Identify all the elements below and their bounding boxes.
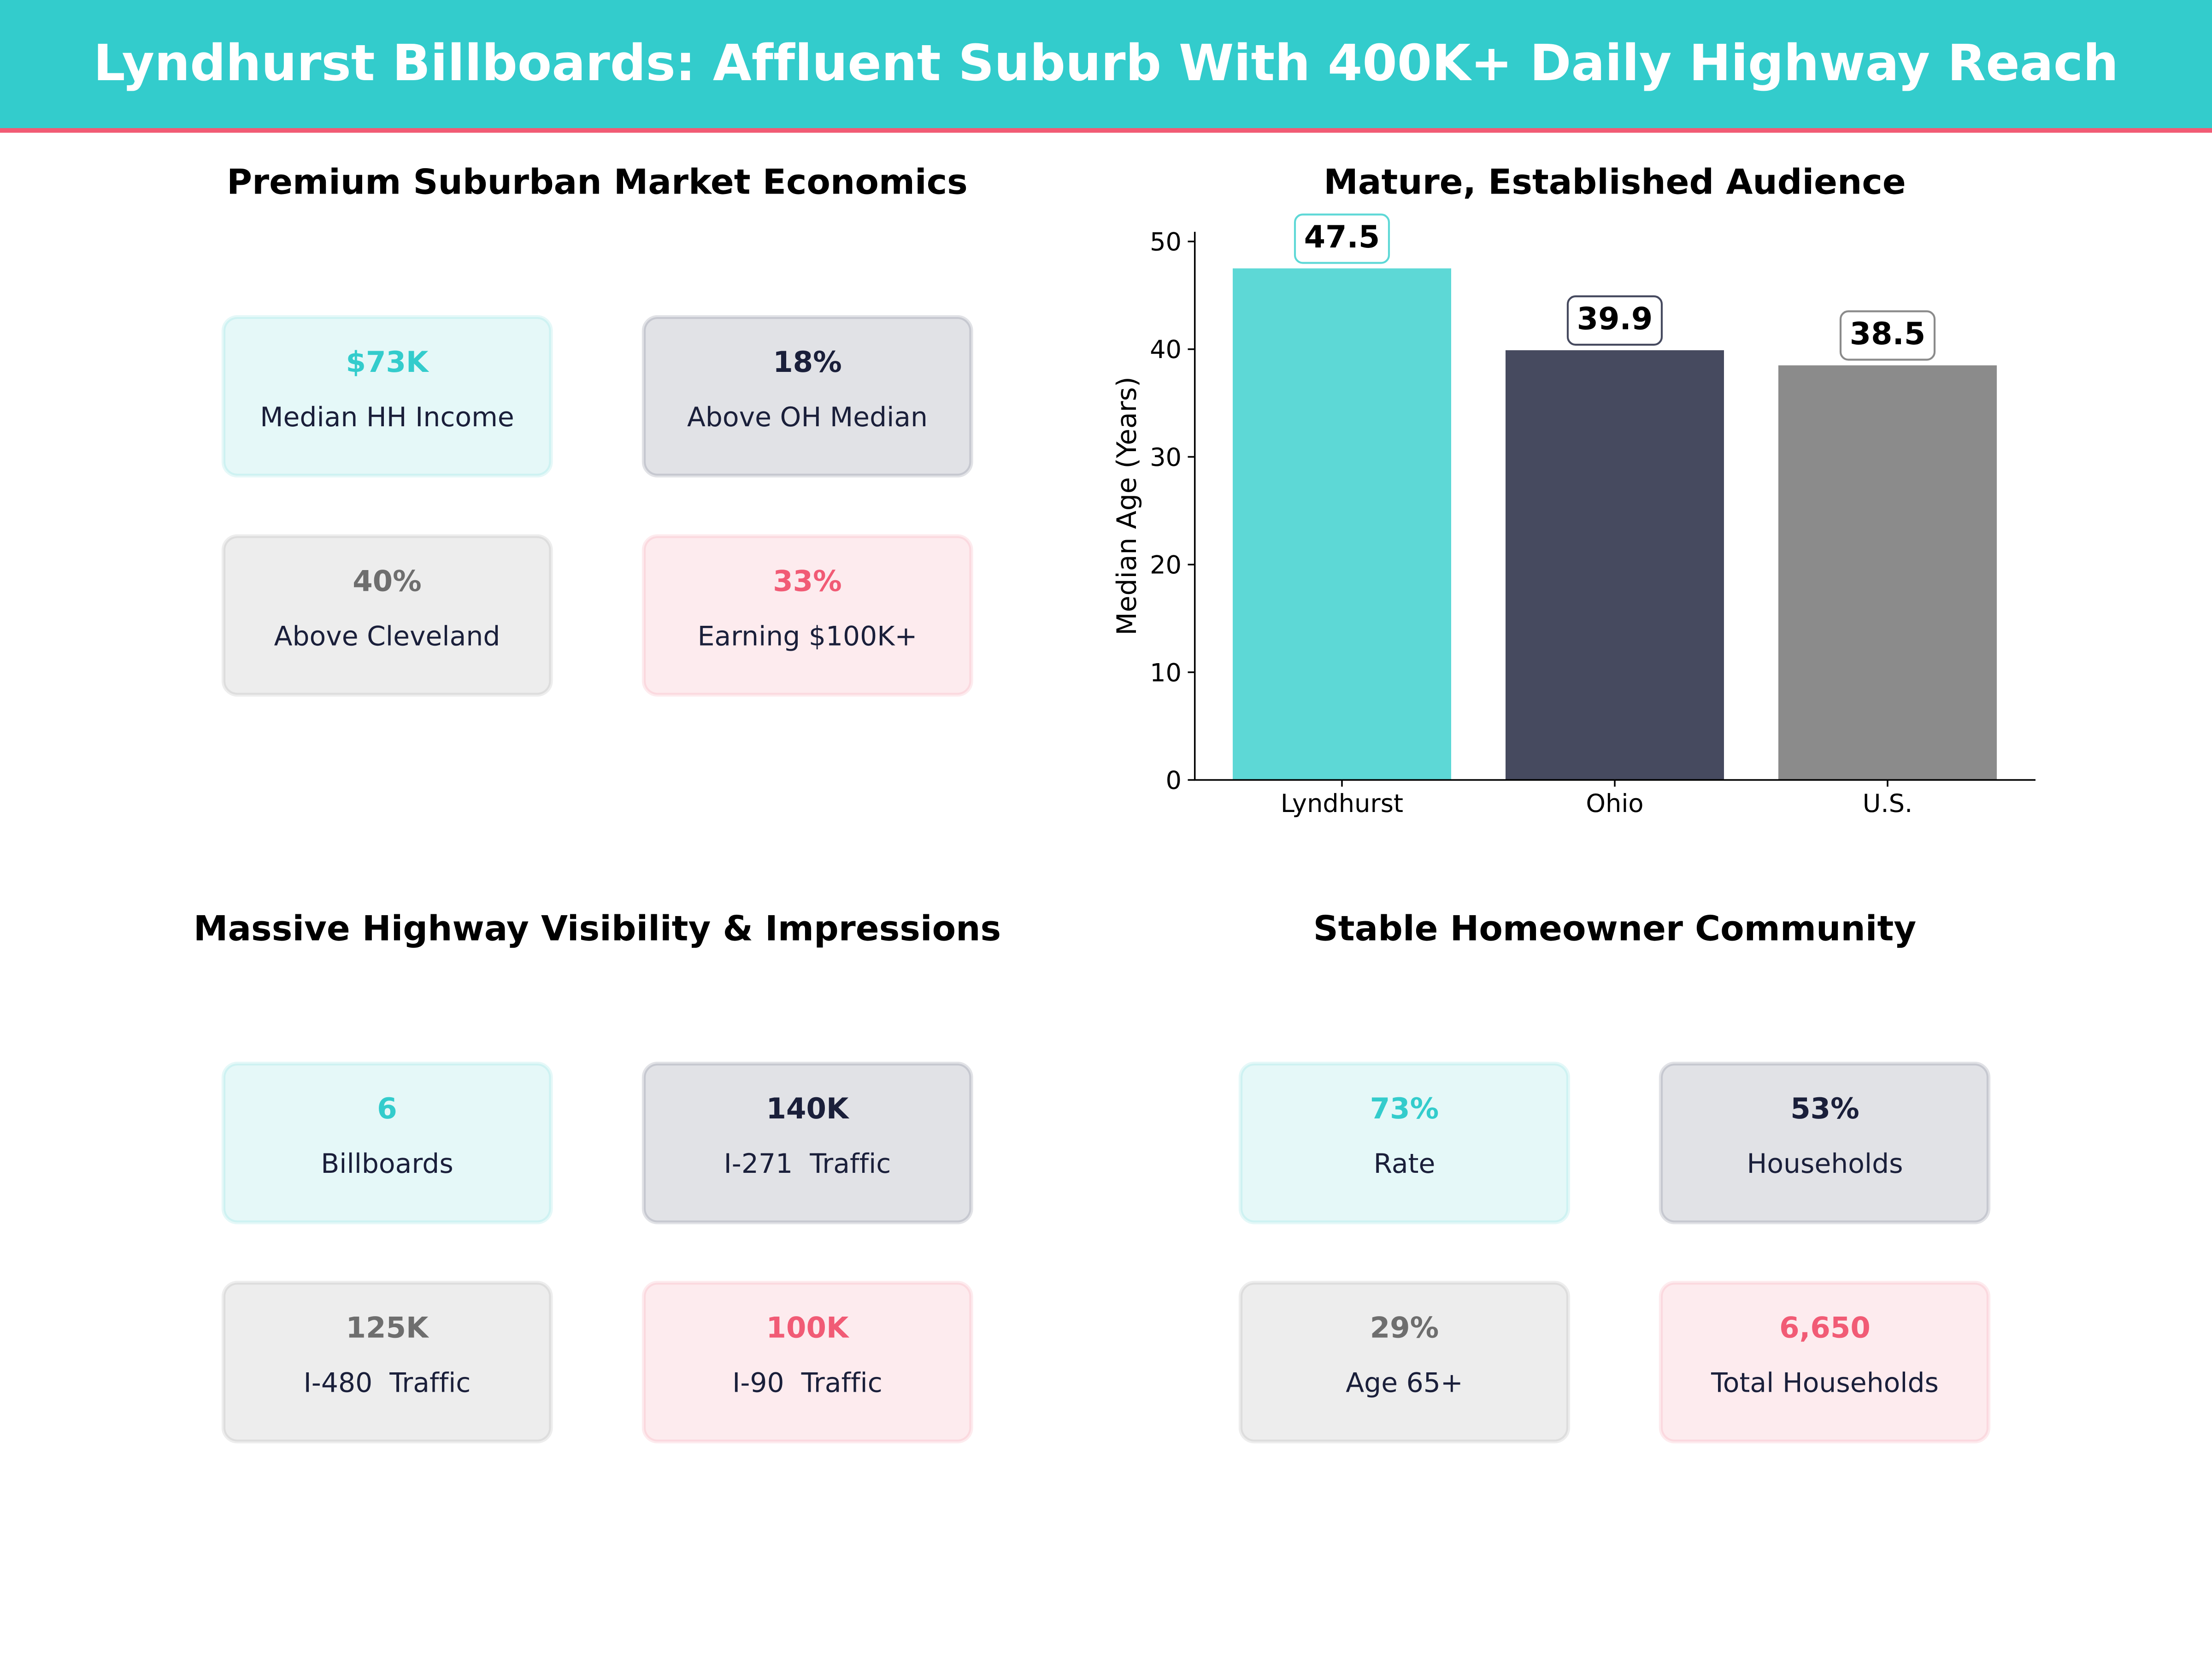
heading: audience: Mature, Established Audience xyxy=(1324,161,1906,202)
value label: 47.5: 47.5 xyxy=(1304,219,1380,255)
panel: mature established audience xyxy=(1111,161,2036,818)
title: Lyndhurst Billboards: Affluent Suburb With 400K+ Daily Highway Reach xyxy=(94,34,2118,92)
bar: U.S. xyxy=(1778,365,1997,780)
card: households: 53% xyxy=(1790,1092,1859,1125)
card: earning 100K plus xyxy=(644,536,971,695)
bar: Lyndhurst xyxy=(1233,268,1451,780)
x tick labels xyxy=(1281,789,1912,818)
card: households xyxy=(1661,1064,1988,1222)
card: above Cleveland xyxy=(224,536,551,695)
card: age 65 plus xyxy=(1241,1283,1568,1441)
card: I-480 traffic: I-480 Traffic xyxy=(304,1367,471,1398)
card: earning 100K plus: Earning $100K+ xyxy=(698,620,917,652)
y tick labels: 0 xyxy=(1166,766,1182,795)
card: I-480 traffic xyxy=(224,1283,551,1441)
panel: premium suburban market economics xyxy=(224,161,971,695)
card: I-90 traffic: I-90 Traffic xyxy=(732,1367,882,1398)
card: above Cleveland: Above Cleveland xyxy=(274,620,500,652)
card: I-480 traffic: 125K xyxy=(346,1311,429,1345)
card: median household income: Median HH Income xyxy=(260,401,514,433)
card: total households: 6,650 xyxy=(1779,1311,1871,1345)
card: I-271 traffic: 140K xyxy=(766,1092,850,1125)
y tick labels: 50 xyxy=(1150,228,1182,256)
heading: highway visibility: Massive Highway Visibility & Impressions xyxy=(194,908,1001,948)
x tick labels: Ohio xyxy=(1586,789,1644,818)
value label: 38.5: 38.5 xyxy=(1850,316,1925,352)
card: households: Households xyxy=(1747,1148,1903,1179)
x tick labels: U.S. xyxy=(1863,789,1912,818)
y tick labels xyxy=(1150,228,1182,795)
y tick labels: 10 xyxy=(1150,658,1182,687)
card: I-271 traffic xyxy=(644,1064,971,1222)
y tick labels: 30 xyxy=(1150,443,1182,472)
card: above Ohio median: Above OH Median xyxy=(687,401,928,433)
panel: massive highway visibility and impressions xyxy=(194,908,1001,1441)
card: I-90 traffic: 100K xyxy=(766,1311,850,1345)
y tick labels: 40 xyxy=(1150,335,1182,364)
card: billboards xyxy=(224,1064,551,1222)
card: rate xyxy=(1241,1064,1568,1222)
x tick labels: Lyndhurst xyxy=(1281,789,1403,818)
card: I-271 traffic: I-271 Traffic xyxy=(724,1148,891,1179)
y axis label: Median Age (Years) xyxy=(1111,377,1142,635)
panel: stable homeowner community xyxy=(1241,908,1988,1441)
card: rate: Rate xyxy=(1374,1148,1435,1179)
card: median household income xyxy=(224,317,551,476)
axes xyxy=(1188,232,2036,787)
card: I-90 traffic xyxy=(644,1283,971,1441)
card: earning 100K plus: 33% xyxy=(773,564,842,598)
card: above Ohio median xyxy=(644,317,971,476)
card: age 65 plus: Age 65+ xyxy=(1346,1367,1463,1398)
header banner xyxy=(0,0,2212,133)
bar: Ohio xyxy=(1506,350,1724,780)
card: billboards: 6 xyxy=(377,1092,397,1125)
bar chart: median age xyxy=(1111,215,2036,818)
value label: 47.5 xyxy=(1295,215,1389,263)
card: above Cleveland: 40% xyxy=(353,564,422,598)
card: age 65 plus: 29% xyxy=(1370,1311,1439,1345)
value label: 39.9 xyxy=(1568,296,1662,345)
value label: 38.5 xyxy=(1841,312,1935,359)
card: above Ohio median: 18% xyxy=(773,345,842,379)
card: billboards: Billboards xyxy=(321,1148,453,1179)
heading: economics: Premium Suburban Market Economics xyxy=(227,161,968,202)
value label: 39.9: 39.9 xyxy=(1577,300,1653,336)
card: rate: 73% xyxy=(1370,1092,1439,1125)
heading: homeowner community: Stable Homeowner Community xyxy=(1313,908,1916,948)
card: total households: Total Households xyxy=(1711,1367,1939,1398)
card: total households xyxy=(1661,1283,1988,1441)
card: median household income: $73K xyxy=(346,345,429,379)
y tick labels: 20 xyxy=(1150,551,1182,580)
